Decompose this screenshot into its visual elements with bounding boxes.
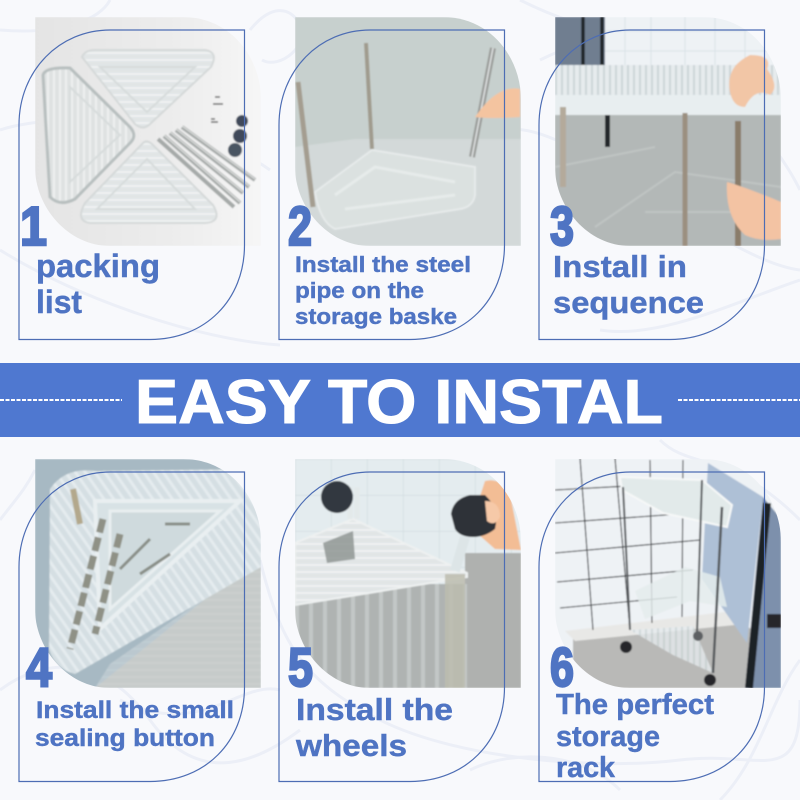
caption: packing list: list	[36, 284, 82, 320]
dashed line right	[678, 399, 800, 401]
caption: install the steel pipe: pipe on the	[295, 278, 424, 303]
number 3: 3	[550, 195, 574, 257]
caption: install the wheels: wheels	[295, 728, 407, 763]
title: EASY TO INSTAL	[135, 368, 663, 437]
frame outline	[279, 30, 504, 340]
photo: installing steel pipe	[295, 17, 521, 246]
caption: install the wheels: Install the	[296, 692, 453, 727]
frame outline	[19, 30, 244, 340]
photo: stacking shelves	[555, 17, 781, 246]
number 5: 5	[288, 636, 313, 698]
caption: install in sequence: sequence	[553, 285, 704, 320]
caption: install the small sealing button	[35, 697, 234, 752]
caption: the perfect storage rack: storage	[556, 721, 660, 753]
caption: packing list: packing	[36, 248, 160, 284]
caption: install the wheels	[295, 692, 453, 763]
photo: finished storage rack	[555, 458, 781, 688]
photo: sealing button close-up	[35, 459, 261, 688]
frame outline	[539, 472, 764, 782]
caption: install the steel pipe: storage baske	[295, 304, 457, 329]
panel: step 5 wheels	[279, 459, 521, 782]
caption: the perfect storage rack	[556, 689, 714, 784]
caption: install the small sealing button: Install the small	[36, 697, 234, 724]
number 6: 6	[550, 636, 574, 698]
caption: packing list	[36, 248, 160, 320]
caption: install the steel pipe	[295, 252, 471, 329]
number 2: 2	[288, 195, 312, 257]
frame outline	[19, 472, 244, 782]
panel: step 2 steel pipe	[279, 17, 521, 340]
number 4: 4	[26, 636, 52, 698]
caption: the perfect storage rack: The perfect	[556, 689, 714, 721]
caption: install the small sealing button: sealing button	[35, 725, 215, 752]
number 1: 1	[20, 195, 47, 257]
dashed line left	[0, 399, 122, 401]
panel: step 6 storage rack	[539, 458, 781, 784]
panel: step 3 install in sequence	[539, 17, 781, 340]
caption: install in sequence: Install in	[553, 249, 687, 284]
panel: step 1 packing list	[19, 17, 261, 340]
panel: step 4 sealing button	[19, 459, 261, 782]
caption: install the steel pipe: Install the steel	[295, 252, 471, 277]
frame outline	[539, 30, 764, 340]
caption: the perfect storage rack: rack	[556, 752, 616, 784]
photo: packing list parts	[35, 17, 261, 246]
banner: easy to instal	[0, 363, 800, 437]
caption: install in sequence	[553, 249, 704, 320]
photo: attaching wheels	[295, 459, 521, 688]
frame outline	[279, 472, 504, 782]
